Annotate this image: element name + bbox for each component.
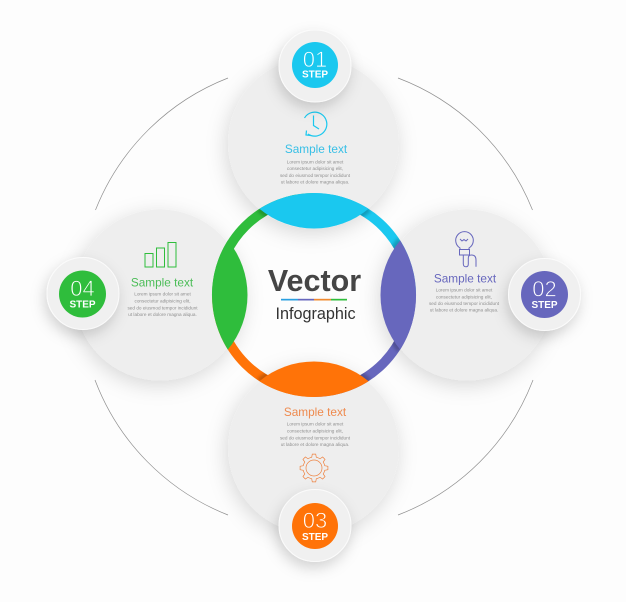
heading: Sample text: [284, 405, 347, 419]
text block: consectetur adipisicing elit,: [436, 294, 492, 300]
badge: step 02: STEP: [531, 300, 558, 311]
text block: [280, 422, 351, 447]
ring shading: [259, 209, 400, 381]
title underline: [281, 299, 347, 300]
badge: step 01: STEP: [302, 70, 328, 80]
lens: green: [212, 240, 248, 350]
text block: [280, 159, 351, 185]
icon: bar chart: [145, 242, 176, 267]
lens: orange: [259, 361, 369, 397]
step 1 content: [280, 112, 351, 185]
text block: consectetur adipisicing elit,: [134, 298, 191, 303]
step 3 content: [280, 405, 351, 482]
text block: ut labore et dolore magna aliqua.: [281, 180, 349, 185]
center title: Vector: [268, 264, 361, 298]
text block: ut labore et dolore magna aliqua.: [128, 312, 197, 317]
panel: step 1 circle: [228, 58, 399, 228]
panel: step 4 circle: [74, 210, 246, 380]
text block: Lorem ipsum dolor sit amet: [436, 288, 493, 293]
badge: step 02: 02: [532, 276, 557, 302]
badge: step 04: [47, 258, 119, 330]
badge: step 03: STEP: [302, 532, 328, 543]
text block: ut labore et dolore magna aliqua.: [281, 442, 349, 447]
badge: step 03: 03: [303, 508, 327, 533]
lens: purple: [380, 240, 416, 350]
center title: Infographic: [275, 305, 356, 323]
icon: light bulb: [456, 232, 476, 267]
badge: step 04: STEP: [69, 300, 96, 310]
icon: gear: [300, 454, 328, 482]
text block: sed do eiusmod tempor incididunt: [280, 173, 351, 178]
panel: step 3 circle: [228, 362, 399, 534]
heading: Sample text: [131, 276, 194, 290]
badge: step 02: [508, 258, 580, 330]
text block: Lorem ipsum dolor sit amet: [287, 159, 344, 164]
central ring: [212, 193, 416, 397]
badge: step 01: [279, 30, 351, 102]
badge: step 03: [279, 490, 351, 562]
text block: Lorem ipsum dolor sit amet: [134, 292, 191, 297]
text block: sed do eiusmod tempor incididunt: [429, 301, 500, 306]
icon: clock: [304, 112, 327, 136]
text block: consectetur adipisicing elit,: [287, 166, 343, 171]
heading: Sample text: [434, 272, 497, 286]
badge: step 04: 04: [70, 276, 95, 301]
badge: step 01: 01: [303, 47, 327, 72]
outer arcs: [95, 78, 533, 515]
text block: [429, 288, 500, 313]
step 4 content: [127, 242, 198, 317]
text block: sed do eiusmod tempor incididunt: [280, 436, 351, 440]
step 2 content: [429, 232, 500, 313]
text block: [127, 292, 198, 317]
text block: Lorem ipsum dolor sit amet: [287, 422, 344, 427]
lens: blue: [259, 193, 369, 229]
text block: ut labore et dolore magna aliqua.: [430, 308, 498, 313]
panel: step 2 circle: [382, 210, 552, 380]
text block: consectetur adipisicing elit,: [287, 428, 343, 434]
center title: [268, 264, 361, 323]
heading: Sample text: [285, 142, 348, 156]
text block: sed do eiusmod tempor incididunt: [127, 305, 198, 310]
